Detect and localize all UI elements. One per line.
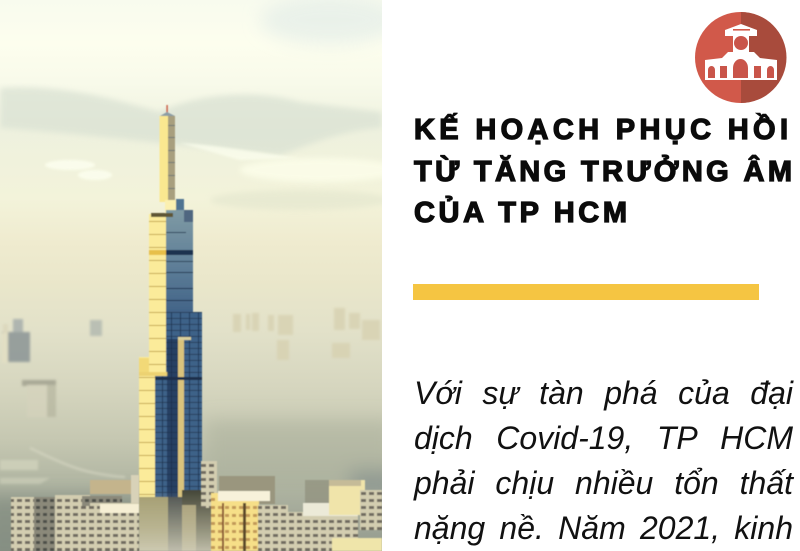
mid shaft [166,312,202,502]
foreground apartment blocks [11,461,382,551]
title: CỦA TP HCM [414,195,627,229]
tower base into fog [139,497,168,551]
antenna [166,105,168,114]
tower: Landmark 81 [139,105,219,551]
title: TỪ TĂNG TRƯỞNG ÂM [414,154,792,188]
upper shaft [165,200,176,214]
panel: skyline photo of Landmark 81 tower above fog [0,0,382,551]
intro text block [413,375,794,546]
yellow divider bar [413,284,759,300]
intro text block: nặng nề. Năm 2021, kinh [414,510,793,546]
intro text block: phải chịu nhiều tổn thất [414,465,793,501]
badge circle [695,12,786,103]
intro text block: dịch Covid-19, TP HCM [414,420,793,456]
intro text block: Với sự tàn phá của đại [414,375,793,411]
haze shading [0,420,400,551]
market building silhouette [705,24,777,80]
title [414,112,792,229]
distant city [0,308,380,484]
spire [160,116,168,202]
sky background [0,0,382,551]
icon: Ben Thanh market badge [695,12,786,103]
title: KẾ HOẠCH PHỤC HỒI [414,112,788,146]
badge shaded half [741,12,787,103]
clouds [0,0,400,210]
